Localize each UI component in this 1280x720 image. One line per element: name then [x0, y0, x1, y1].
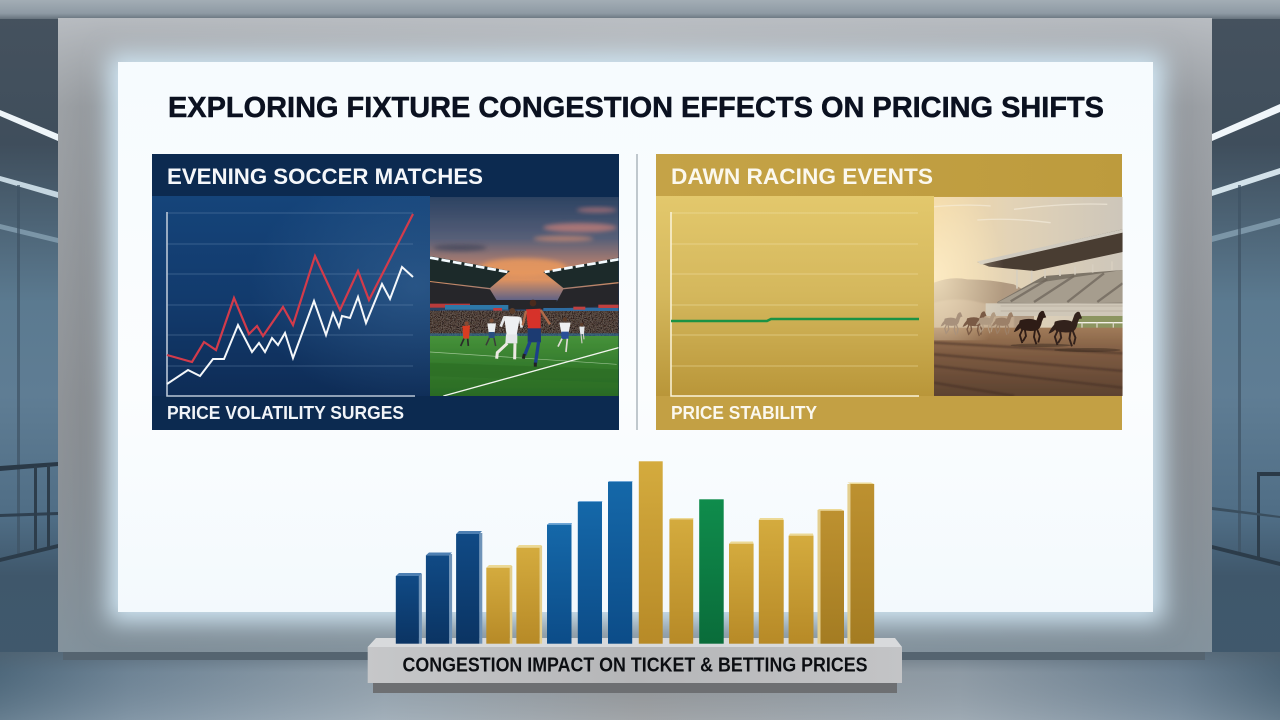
title: EXPLORING FIXTURE CONGESTION EFFECTS ON PRICING SHIFTS: [168, 92, 1104, 124]
display screen: [118, 62, 1153, 612]
panel: dawn racing events: [656, 154, 1123, 430]
chart: price volatility: [152, 196, 430, 396]
chart: price stability: [656, 196, 934, 396]
screen glow: [108, 54, 1164, 622]
horses: [941, 311, 1082, 346]
floor: [0, 652, 1280, 720]
soccer heading: EVENING SOCCER MATCHES: [167, 164, 483, 189]
label: price volatility surges: PRICE VOLATILITY SURGES: [167, 402, 404, 423]
photo: floodlit stadium match: [430, 197, 619, 396]
red price line: [167, 214, 413, 362]
players: [461, 300, 585, 367]
bar chart: congestion impact: [368, 461, 902, 693]
photo: dawn horse racing: [934, 197, 1123, 396]
label: price stability: PRICE STABILITY: [671, 402, 818, 423]
pedestal label: CONGESTION IMPACT ON TICKET & BETTING PRICES: [402, 654, 868, 676]
racing heading: DAWN RACING EVENTS: [671, 164, 933, 189]
white price line: [167, 267, 413, 384]
pedestal base: [368, 638, 902, 693]
bars: [396, 461, 874, 644]
green price line: [671, 319, 919, 321]
centre divider: [636, 154, 638, 430]
panel: evening soccer matches: [152, 154, 619, 430]
